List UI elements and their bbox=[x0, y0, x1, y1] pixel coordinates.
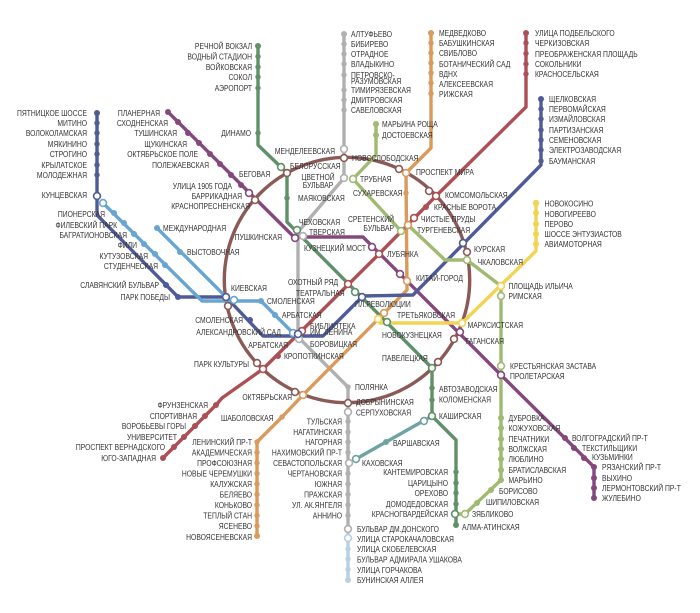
labels: light blue line: СТУДЕНЧЕСКАЯ bbox=[104, 262, 158, 271]
labels: yellow line bbox=[468, 199, 622, 330]
labels: red line: ЮГО-ЗАПАДНАЯ bbox=[101, 454, 156, 463]
labels: red line: КРОПОТКИНСКАЯ bbox=[284, 352, 344, 361]
labels: green line: НОВОКУЗНЕЦКАЯ bbox=[382, 331, 442, 340]
labels: orange line: СУХАРЕВСКАЯ bbox=[353, 189, 403, 198]
labels: dark blue line: СЕМЕНОВСКАЯ bbox=[549, 136, 601, 145]
labels: green line: СОКОЛ bbox=[229, 73, 252, 82]
labels: light green line: БУЛЬВАР bbox=[363, 224, 394, 233]
labels: orange line: НОВЫЕ ЧЕРЕМУШКИ bbox=[182, 469, 252, 479]
labels: dark blue line: СМОЛЕНСКАЯ bbox=[195, 316, 243, 325]
labels: green line: АЛМА-АТИНСКАЯ bbox=[462, 523, 520, 532]
labels: purple line: УЛИЦА 1905 ГОДА bbox=[173, 182, 232, 191]
labels: orange line bbox=[182, 29, 510, 542]
labels: ring and teal lines: КРАСНОПРЕСНЕНСКАЯ bbox=[171, 202, 250, 211]
labels: grey and pale blue lines: ПРАЖСКАЯ bbox=[304, 490, 342, 500]
line: red Sokolnicheskaya bbox=[160, 30, 529, 461]
labels: red line: ПАРК КУЛЬТУРЫ bbox=[194, 360, 249, 369]
labels: grey and pale blue lines: ПОЛЯНКА bbox=[355, 383, 388, 392]
labels: orange line: КОНЬКОВО bbox=[215, 501, 252, 510]
labels: light green line: КРЕСТЬЯНСКАЯ ЗАСТАВА bbox=[510, 362, 596, 371]
labels: grey and pale blue lines: НАГАТИНСКАЯ bbox=[293, 428, 342, 437]
labels: grey and pale blue lines: ПЕТРОВСКО- bbox=[351, 71, 395, 80]
labels: purple line: ПРОЛЕТАРСКАЯ bbox=[510, 372, 565, 381]
labels: dark blue line: ПЯТНИЦКОЕ ШОССЕ bbox=[17, 109, 87, 118]
labels: grey and pale blue lines: БУНИНСКАЯ АЛЛЕЯ bbox=[357, 576, 423, 585]
labels: dark blue line: СЛАВЯНСКИЙ БУЛЬВАР bbox=[80, 281, 159, 290]
labels: green line: ДОМОДЕДОВСКАЯ bbox=[386, 500, 448, 509]
labels: purple line: БАРРИКАДНАЯ bbox=[192, 192, 242, 201]
labels: light green line: ЧКАЛОВСКАЯ bbox=[478, 258, 523, 267]
labels: light green line: МАРЬИНО bbox=[509, 476, 543, 485]
labels: orange line: ШАБОЛОВСКАЯ bbox=[221, 414, 274, 423]
labels: orange line: СВИБЛОВО bbox=[439, 49, 477, 58]
labels: grey and pale blue lines: ЧЕХОВСКАЯ bbox=[299, 218, 340, 227]
labels: dark blue line: ВОЛОКОЛАМСКАЯ bbox=[26, 129, 87, 138]
labels: grey and pale blue lines: АЛТУФЬЕВО bbox=[351, 30, 392, 39]
labels: orange line: ПРОСПЕКТ МИРА bbox=[416, 168, 474, 177]
labels: green line: КАНТЕМИРОВСКАЯ bbox=[383, 468, 448, 477]
labels: yellow line: ПЕРОВО bbox=[545, 220, 573, 229]
labels: green line: БЕЛОРУССКАЯ bbox=[290, 162, 340, 171]
labels: purple line: БЕГОВАЯ bbox=[239, 170, 270, 179]
labels: purple line: СХОДНЕНСКАЯ bbox=[117, 119, 168, 128]
labels: yellow line: АВИАМОТОРНАЯ bbox=[545, 240, 602, 249]
labels: red line: ПРЕОБРАЖЕНСКАЯ ПЛОЩАДЬ bbox=[535, 50, 638, 59]
labels: red line: УНИВЕРСИТЕТ bbox=[127, 433, 178, 442]
labels: orange line: АКАДЕМИЧЕСКАЯ bbox=[192, 448, 252, 458]
labels: grey and pale blue lines: УЛИЦА ГОРЧАКОВА bbox=[357, 566, 422, 575]
labels: purple line: ВОЛГОГРАДСКИЙ ПР-Т bbox=[572, 434, 648, 443]
labels: light blue line: БАГРАТИОНОВСКАЯ bbox=[59, 231, 127, 240]
labels: orange line: ТРЕТЬЯКОВСКАЯ bbox=[397, 311, 455, 320]
labels: light blue line: ПИОНЕРСКАЯ bbox=[58, 210, 105, 219]
labels: light blue line: СМОЛЕНСКАЯ bbox=[267, 297, 315, 306]
labels: light green line: БРАТИСЛАВСКАЯ bbox=[509, 466, 566, 475]
labels: red line bbox=[76, 29, 638, 463]
labels: dark blue line: АРБАТСКАЯ bbox=[248, 341, 288, 350]
labels: red line: ЧИСТЫЕ ПРУДЫ bbox=[421, 215, 475, 224]
labels: red line: СОКОЛЬНИКИ bbox=[535, 60, 582, 69]
labels: dark blue line: ЩЕЛКОВСКАЯ bbox=[549, 95, 596, 104]
labels: light green line: ПЕЧАТНИКИ bbox=[509, 435, 549, 444]
labels: green line: ЦАРИЦЫНО bbox=[408, 479, 448, 488]
labels: grey and pale blue lines: УЛ. АК.ЯНГЕЛЯ bbox=[292, 501, 342, 510]
labels: grey and pale blue lines: ЮЖНАЯ bbox=[315, 480, 342, 489]
labels: light green line: ШИПИЛОВСКАЯ bbox=[486, 498, 539, 507]
labels: green line: ТВЕРСКАЯ bbox=[309, 228, 345, 237]
labels: green line: ВОЙКОВСКАЯ bbox=[206, 63, 252, 72]
labels: purple line: ПЛАНЕРНАЯ bbox=[118, 109, 160, 118]
labels: orange line: ЯСЕНЕВО bbox=[219, 522, 252, 531]
labels: grey and pale blue lines: БУЛЬВАР АДМИРАЛА УШАКОВА bbox=[357, 555, 462, 565]
labels: green line: КОЛОМЕНСКАЯ bbox=[439, 395, 491, 405]
labels: red line: СПОРТИВНАЯ bbox=[150, 412, 197, 421]
labels: dark blue line bbox=[17, 95, 621, 350]
line: light green Lyublinskaya bbox=[353, 121, 504, 514]
labels: dark blue line: МИТИНО bbox=[57, 119, 87, 128]
labels: dark blue line: ПАРК ПОБЕДЫ bbox=[121, 293, 170, 302]
labels: purple line: РЯЗАНСКИЙ ПР-Т bbox=[602, 463, 661, 472]
line: purple Tagansko-Krasnopresnenskaya bbox=[165, 109, 597, 501]
labels: purple line: ОКТЯБРЬСКОЕ ПОЛЕ bbox=[127, 150, 198, 159]
labels: green line: ВОДНЫЙ СТАДИОН bbox=[187, 52, 252, 62]
labels: orange line: БАБУШКИНСКАЯ bbox=[439, 39, 495, 48]
labels: light green line: ЛЮБЛИНО bbox=[509, 455, 544, 464]
labels: light blue line: ФИЛЕВСКИЙ ПАРК bbox=[56, 221, 118, 230]
labels: grey and pale blue lines: БУЛЬВАР bbox=[303, 181, 333, 190]
labels: light green line: ДОСТОЕВСКАЯ bbox=[382, 131, 433, 140]
labels: green line: АЭРОПОРТ bbox=[215, 84, 253, 93]
labels: purple line: ЩУКИНСКАЯ bbox=[144, 140, 187, 149]
labels: red line: КРАСНЫЕ ВОРОТА bbox=[434, 203, 496, 212]
labels: yellow line: ПЛОЩАДЬ ИЛЬИЧА bbox=[509, 282, 573, 291]
labels: grey and pale blue lines: ЧЕРТАНОВСКАЯ bbox=[288, 469, 342, 479]
labels: light blue line: ФИЛИ bbox=[118, 241, 137, 250]
labels: light green line: БОРИСОВО bbox=[499, 487, 538, 496]
labels: green line: ТЕАТРАЛЬНАЯ bbox=[296, 289, 345, 298]
labels: light green line: КОЖУХОВСКАЯ bbox=[509, 424, 560, 433]
labels: grey and pale blue lines: УЛИЦА СКОБЕЛЕВСКАЯ bbox=[357, 545, 436, 554]
labels: grey and pale blue lines: ДМИТРОВСКАЯ bbox=[351, 96, 402, 105]
labels: light green line: МАРЬИНА РОЩА bbox=[382, 120, 438, 129]
labels: grey and pale blue lines: БОРОВИЦКАЯ bbox=[310, 340, 357, 349]
labels: green line: КАШИРСКАЯ bbox=[439, 412, 481, 421]
labels: purple line: ПУШКИНСКАЯ bbox=[235, 233, 282, 242]
labels: light blue line: КУТУЗОВСКАЯ bbox=[100, 252, 148, 261]
labels: light green line: ЗЯБЛИКОВО bbox=[472, 510, 514, 519]
labels: yellow line: НОВОКОСИНО bbox=[545, 199, 594, 209]
labels: green line: РЕЧНОЙ ВОКЗАЛ bbox=[195, 42, 252, 51]
labels: orange line: БЕЛЯЕВО bbox=[220, 490, 252, 500]
labels: dark blue line: КРЫЛАТСКОЕ bbox=[41, 161, 87, 170]
labels: purple line: ЛЕРМОНТОВСКИЙ ПР-Т bbox=[602, 484, 681, 493]
labels: dark blue line: ПАРТИЗАНСКАЯ bbox=[549, 126, 603, 135]
labels: orange line: АЛЕКСЕЕВСКАЯ bbox=[439, 80, 493, 89]
labels: orange line: МЕДВЕДКОВО bbox=[439, 29, 486, 38]
labels: grey and pale blue lines bbox=[272, 30, 462, 585]
labels: orange line: ПРОФСОЮЗНАЯ bbox=[197, 459, 252, 468]
labels: ring and teal lines: НОВОСЛОБОДСКАЯ bbox=[352, 154, 418, 163]
labels: dark blue line: КУНЦЕВСКАЯ bbox=[42, 191, 87, 200]
labels: purple line: ТУШИНСКАЯ bbox=[134, 129, 177, 138]
labels: dark blue line: МОЛОДЕЖНАЯ bbox=[37, 171, 87, 180]
labels: dark blue line: КИЕВСКАЯ bbox=[231, 284, 267, 293]
labels: dark blue line: БАУМАНСКАЯ bbox=[549, 157, 595, 166]
labels: orange line: ТЕПЛЫЙ СТАН bbox=[203, 511, 252, 521]
labels: red line: ВОРОБЬЕВЫ ГОРЫ bbox=[122, 422, 186, 431]
labels: grey and pale blue lines: УЛИЦА СТАРОКАЧАЛОВСКАЯ bbox=[357, 535, 454, 544]
labels: red line: ОХОТНЫЙ РЯД bbox=[288, 278, 338, 287]
line: pale blue Butovskaya bbox=[345, 529, 351, 583]
labels: dark blue line: МЯКИНИНО bbox=[48, 140, 87, 149]
line: yellow Kalininskaya bbox=[380, 200, 539, 323]
labels: light blue line: МЕЖДУНАРОДНАЯ bbox=[163, 224, 226, 233]
labels: orange line: ЛЕНИНСКИЙ ПР-Т bbox=[192, 438, 253, 447]
labels: light blue line: АРБАТСКАЯ bbox=[282, 311, 322, 320]
line: green Zamoskvoretskaya bbox=[255, 43, 459, 528]
labels: grey and pale blue lines: НАХИМОВСКИЙ ПР-Т bbox=[272, 448, 343, 458]
line: teal Kakhovskaya bbox=[356, 416, 432, 459]
labels: dark blue line: ПЛ.РЕВОЛЮЦИИ bbox=[355, 300, 411, 309]
labels: grey and pale blue lines: ЦВЕТНОЙ bbox=[301, 173, 335, 182]
labels: light green line: СРЕТЕНСКИЙ bbox=[348, 215, 394, 224]
labels: light green line: ВОЛЖСКАЯ bbox=[509, 445, 547, 454]
labels: dark blue line: ЭЛЕКТРОЗАВОДСКАЯ bbox=[549, 146, 621, 155]
labels: light green line: ТРУБНАЯ bbox=[360, 175, 392, 184]
labels: purple line: ЖУЛЕБИНО bbox=[602, 494, 641, 503]
labels: orange line: КАЛУЖСКАЯ bbox=[210, 480, 252, 489]
labels: red line: ЧЕРКИЗОВСКАЯ bbox=[535, 39, 589, 48]
labels: grey and pale blue lines: РАЗУМОВСКАЯ bbox=[351, 77, 401, 86]
labels: grey and pale blue lines: СЕРПУХОВСКАЯ bbox=[356, 408, 411, 418]
labels: orange line: РИЖСКАЯ bbox=[439, 90, 473, 99]
labels: orange line: ОКТЯБРЬСКАЯ bbox=[242, 393, 292, 402]
labels: grey and pale blue lines: СЕВАСТОПОЛЬСКАЯ bbox=[273, 459, 342, 468]
labels: grey and pale blue lines: НАГОРНАЯ bbox=[305, 438, 342, 447]
labels: red line: УЛИЦА ПОДБЕЛЬСКОГО bbox=[535, 29, 615, 38]
labels: orange line: КИТАЙ-ГОРОД bbox=[416, 274, 463, 283]
interchange stations bbox=[94, 146, 504, 541]
labels: grey and pale blue lines: ТИМИРЯЗЕВСКАЯ bbox=[351, 86, 411, 95]
labels: grey and pale blue lines: ТУЛЬСКАЯ bbox=[307, 417, 342, 427]
line: orange Kaluzhsko-Rizhskaya bbox=[254, 30, 434, 539]
labels: light blue line bbox=[56, 210, 322, 337]
labels: orange line: БОТАНИЧЕСКИЙ САД bbox=[439, 60, 510, 69]
labels: orange line: ТУРГЕНЕВСКАЯ bbox=[417, 226, 470, 235]
labels: green line: ОРЕХОВО bbox=[415, 489, 448, 498]
labels: green line: КРАСНОГВАРДЕЙСКАЯ bbox=[372, 510, 448, 519]
labels: purple line bbox=[117, 109, 681, 503]
labels: red line: ПРОСПЕКТ ВЕРНАДСКОГО bbox=[76, 443, 165, 452]
labels: grey and pale blue lines: АННИНО bbox=[313, 511, 342, 521]
labels: grey and pale blue lines: БИБИРЕВО bbox=[351, 40, 389, 49]
labels: green line: ДИНАМО bbox=[221, 129, 251, 138]
line: dark blue Arbatsko-Pokrovskaya bbox=[94, 96, 544, 336]
line: brown ring bbox=[224, 157, 470, 403]
labels: ring and teal lines: КАХОВСКАЯ bbox=[362, 459, 403, 468]
labels: ring and teal lines bbox=[171, 154, 440, 468]
labels: dark blue line: ПЕРВОМАЙСКАЯ bbox=[549, 105, 606, 114]
labels: purple line: КУЗЬМИНКИ bbox=[592, 453, 633, 462]
labels: dark blue line: СТРОГИНО bbox=[50, 150, 87, 159]
labels: red line: ФРУНЗЕНСКАЯ bbox=[158, 401, 208, 410]
labels: ring and teal lines: ДОБРЫНИНСКАЯ bbox=[356, 398, 414, 407]
labels: dark blue line: КУРСКАЯ bbox=[474, 245, 505, 254]
labels: purple line: ТЕКСТИЛЬЩИКИ bbox=[582, 444, 637, 453]
labels: dark blue line: ИЗМАЙЛОВСКАЯ bbox=[549, 115, 605, 124]
labels: ring and teal lines: ВАРШАВСКАЯ bbox=[393, 439, 440, 448]
labels: grey and pale blue lines: БУЛЬВАР ДМ.ДОНСКОГО bbox=[357, 525, 439, 534]
labels: grey and pale blue lines: САВЕЛОВСКАЯ bbox=[351, 106, 402, 115]
labels: green line: МАЯКОВСКАЯ bbox=[298, 194, 345, 203]
labels: light green line: РИМСКАЯ bbox=[509, 292, 542, 301]
labels: purple line: ВЫХИНО bbox=[602, 474, 632, 483]
labels: red line: ЛУБЯНКА bbox=[387, 250, 418, 259]
labels: grey and pale blue lines: ВЛАДЫКИНО bbox=[351, 60, 394, 69]
labels: yellow line: ШОССЕ ЭНТУЗИАСТОВ bbox=[545, 230, 622, 239]
labels: light green line: ДУБРОВКА bbox=[509, 414, 545, 423]
labels: light blue line: ВЫСТОВОЧНАЯ bbox=[187, 248, 240, 257]
labels: purple line: КУЗНЕЦКИЙ МОСТ bbox=[304, 244, 366, 253]
labels: light green line bbox=[348, 120, 596, 519]
labels: yellow line: НОВОГИРЕЕВО bbox=[545, 210, 596, 219]
labels: green line bbox=[187, 42, 520, 532]
labels: orange line: ВДНХ bbox=[439, 70, 457, 79]
labels: red line: КРАСНОСЕЛЬСКАЯ bbox=[535, 70, 599, 79]
line: grey Serpukhovskaya bbox=[298, 31, 351, 529]
labels: yellow line: МАРКСИСТСКАЯ bbox=[468, 321, 523, 330]
labels: red line: КОМСОМОЛЬСКАЯ bbox=[445, 191, 508, 200]
labels: purple line: ПОЛЕЖАЕВСКАЯ bbox=[152, 161, 209, 170]
line: light blue Filyovskaya bbox=[103, 203, 293, 333]
labels: orange line: НОВОЯСЕНЕВСКАЯ bbox=[186, 533, 252, 542]
labels: light blue line: АЛЕКСАНДРОВСКИЙ САД bbox=[196, 328, 281, 337]
labels: red line: БИБЛИОТЕКА bbox=[310, 322, 356, 331]
labels: red line: ИМ. ЛЕНИНА bbox=[310, 328, 353, 337]
labels: green line: АВТОЗАВОДСКАЯ bbox=[439, 385, 498, 394]
labels: grey and pale blue lines: ОТРАДНОЕ bbox=[351, 50, 389, 59]
labels: purple line: ТАГАНСКАЯ bbox=[465, 337, 504, 346]
labels: green line: ПАВЕЛЕЦКАЯ bbox=[382, 354, 428, 363]
labels: grey and pale blue lines: МЕНДЕЛЕЕВСКАЯ bbox=[275, 147, 335, 156]
